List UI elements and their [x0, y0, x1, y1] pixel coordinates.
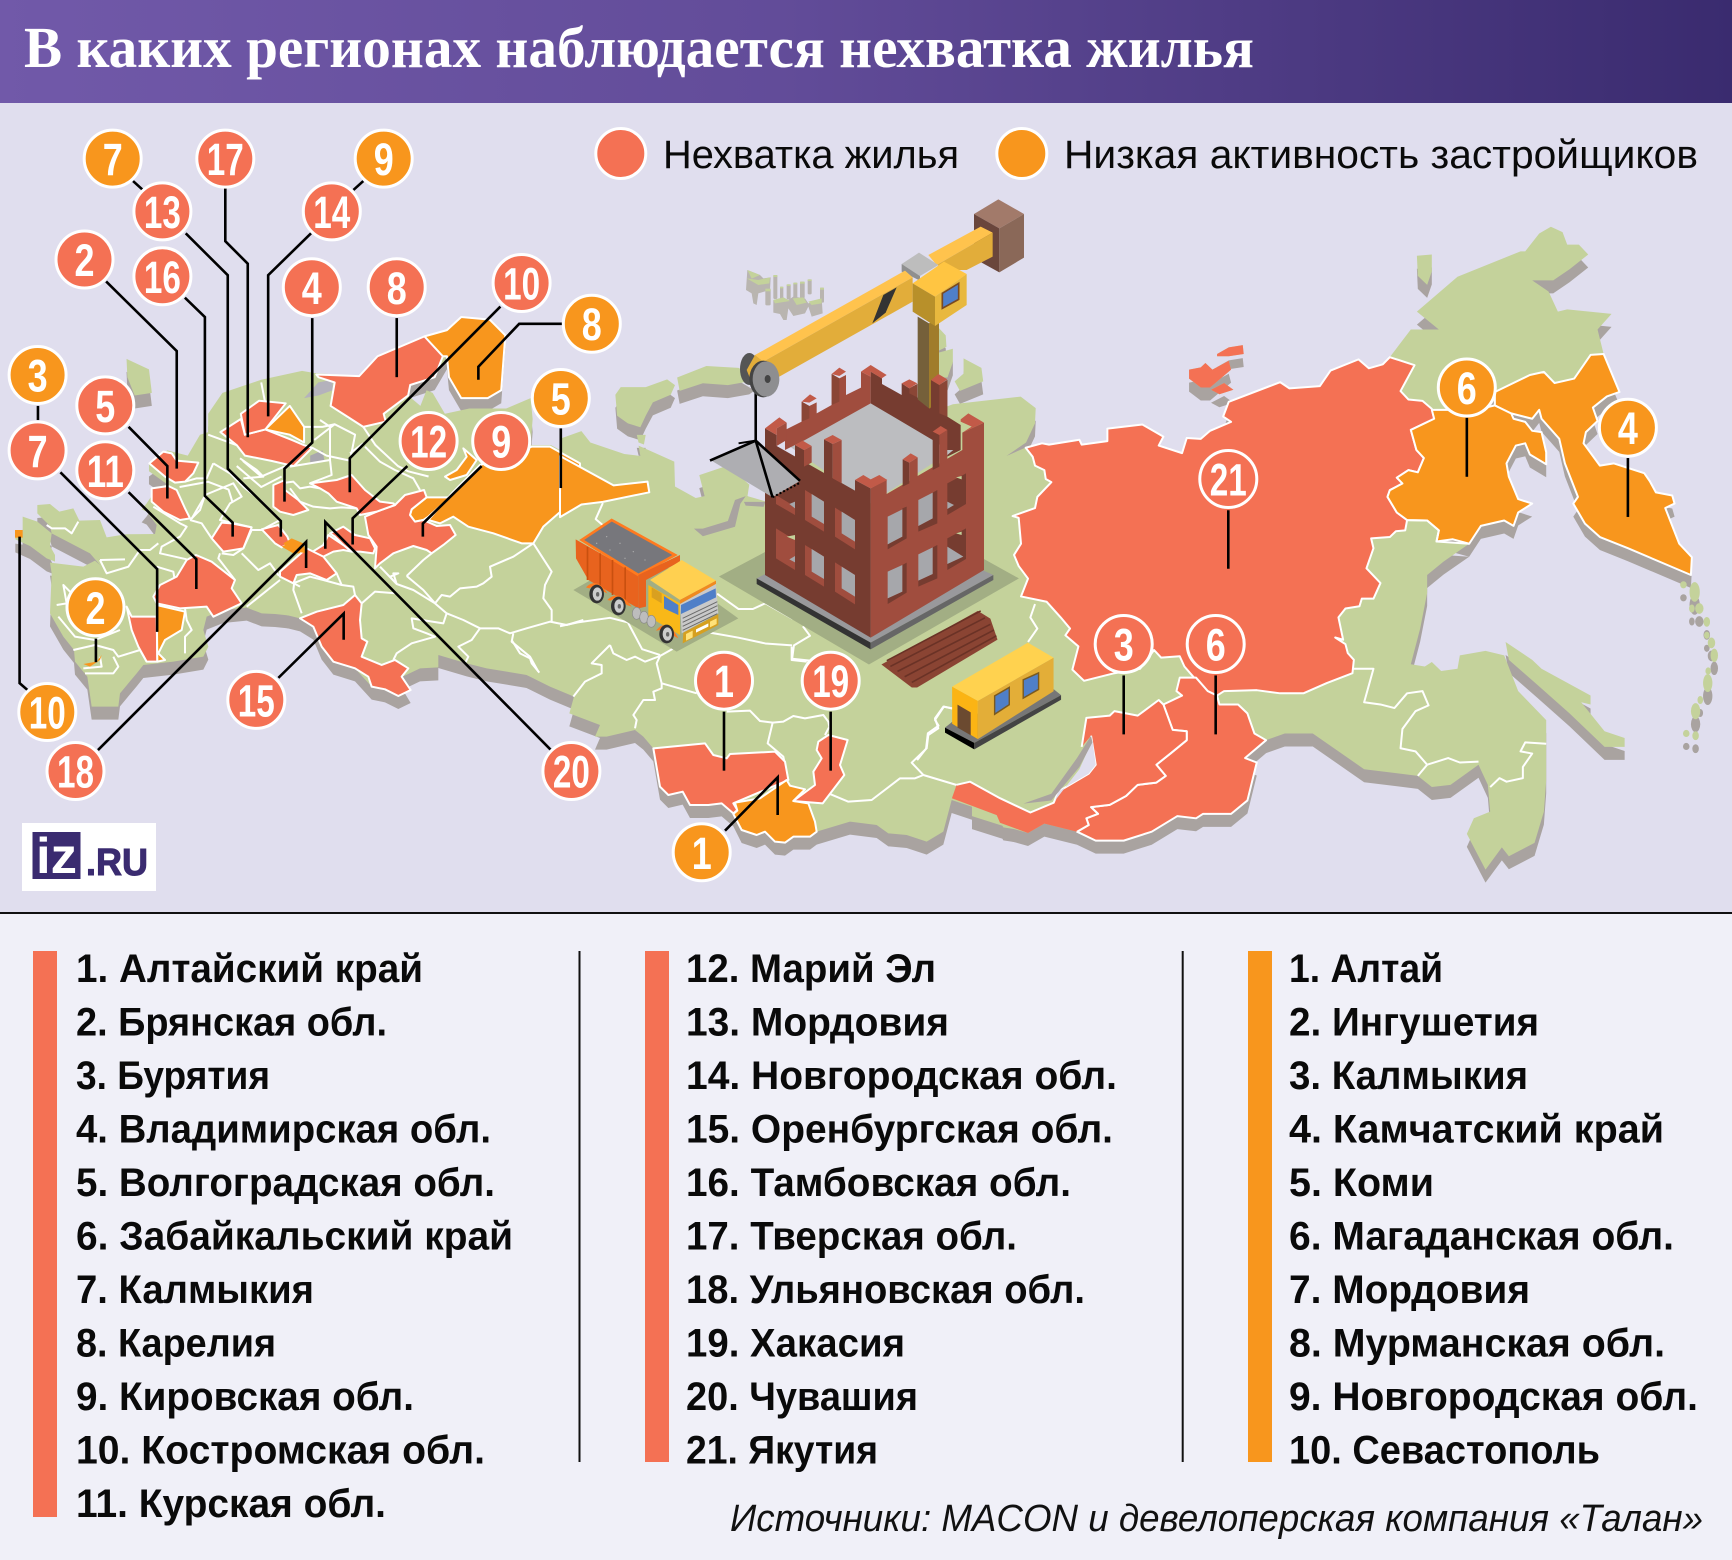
- column 2 color bar: [645, 951, 669, 1462]
- column 3 entries: 1. Алтай: [1289, 947, 1443, 991]
- marker orange 4: 4: [1618, 403, 1638, 454]
- map regions west: [15, 317, 583, 696]
- crane mast: [918, 317, 939, 408]
- legend: [596, 128, 1698, 178]
- marker red 6: 6: [1206, 620, 1226, 670]
- map regions center: [512, 456, 957, 843]
- truck tank: [632, 607, 656, 627]
- column 2 entries: 18. Ульяновская обл.: [686, 1268, 1085, 1312]
- column 2 entries: 21. Якутия: [686, 1428, 878, 1472]
- legend swatch: shortage: [596, 128, 646, 178]
- title: В каких регионах наблюдается нехватка жилья: [24, 15, 1254, 80]
- right wall windows: [888, 473, 966, 604]
- column divider 1: [578, 951, 580, 1462]
- column 1 entries: 11. Курская обл.: [76, 1482, 386, 1526]
- marker red 9: 9: [491, 416, 511, 468]
- marker orange 10: 10: [29, 688, 66, 738]
- crane pulley: [740, 353, 779, 397]
- list column 2: [645, 947, 1117, 1472]
- right front wall: [855, 413, 984, 638]
- divider under map: [0, 912, 1732, 914]
- marker red 3: 3: [1114, 620, 1134, 670]
- marker red 2: 2: [74, 235, 94, 286]
- column 1 entries: 1. Алтайский край: [76, 947, 423, 991]
- marker red 10: 10: [503, 258, 540, 310]
- marker orange 5: [532, 370, 589, 426]
- marker orange 8: [563, 295, 620, 352]
- column 2 entries: 20. Чувашия: [686, 1375, 918, 1419]
- icon: stack of logs: [881, 611, 997, 687]
- truck cab: [648, 560, 718, 643]
- back left wall: [785, 368, 871, 450]
- column 1 entries: 9. Кировская обл.: [76, 1375, 414, 1419]
- legend label: low activity: Низкая активность застройщиков: [1064, 133, 1698, 177]
- hanging platform: [710, 393, 800, 497]
- column 3 entries: 6. Магаданская обл.: [1289, 1214, 1674, 1258]
- back right merlon: [931, 374, 947, 417]
- marker orange 2: 2: [86, 583, 106, 634]
- marker red 15: 15: [238, 676, 275, 726]
- list column 3: [1248, 947, 1698, 1472]
- marker red 1: [696, 652, 752, 709]
- column 3 entries: 2. Ингушетия: [1289, 1000, 1539, 1044]
- marker red 21: 21: [1210, 454, 1247, 506]
- marker orange 2: [67, 579, 124, 636]
- marker red 13: 13: [144, 187, 181, 238]
- column 3 entries: [1289, 947, 1698, 1472]
- map land: [15, 227, 1718, 870]
- list column 1: [33, 947, 513, 1526]
- marker red 14: 14: [313, 187, 350, 238]
- marker red 8: 8: [387, 263, 407, 314]
- foundation slab: [757, 520, 993, 649]
- column 1 entries: [76, 947, 513, 1526]
- column 1 entries: 8. Карелия: [76, 1322, 276, 1366]
- marker red 1: 1: [714, 656, 734, 707]
- column 2 entries: [686, 947, 1117, 1472]
- column 2 entries: 12. Марий Эл: [686, 947, 936, 991]
- crane boom rear: [928, 227, 993, 270]
- legend label: shortage: Нехватка жилья: [663, 133, 959, 177]
- left front wall: [765, 417, 871, 638]
- column 1 color bar: [33, 951, 57, 1517]
- column 3 entries: 4. Камчатский край: [1289, 1108, 1664, 1152]
- icon: dump truck: [573, 520, 738, 652]
- building ground shadow: [719, 496, 1019, 664]
- column 2 entries: 15. Оренбургская обл.: [686, 1108, 1113, 1152]
- column divider 2: [1182, 951, 1184, 1462]
- marker orange 1: 1: [692, 828, 712, 879]
- marker red 5: 5: [95, 381, 115, 432]
- marker red 4: [283, 259, 340, 316]
- legend swatch: low activity: [997, 128, 1047, 178]
- back right wall: [861, 365, 961, 457]
- crane boom front: [747, 271, 913, 387]
- marker red 20: 20: [553, 746, 590, 798]
- marker orange 8: 8: [582, 299, 602, 350]
- island group: Franz Josef Land: [746, 270, 824, 320]
- column 3 entries: 7. Мордовия: [1289, 1268, 1530, 1312]
- marker red 16: 16: [144, 252, 181, 303]
- marker red 6: [1187, 616, 1244, 672]
- crane cab: [913, 262, 967, 326]
- column 1 entries: 5. Волгоградская обл.: [76, 1161, 495, 1205]
- roof slab: [790, 403, 953, 503]
- marker orange 7: [84, 130, 141, 187]
- marker orange 5: 5: [551, 374, 571, 424]
- column 3 color bar: [1248, 951, 1272, 1462]
- marker orange 4: [1599, 399, 1656, 456]
- marker red 7: [9, 422, 66, 479]
- icon: building under construction: [757, 317, 993, 649]
- map extrusion side: [15, 240, 1718, 883]
- column 1 entries: 2. Брянская обл.: [76, 1000, 387, 1044]
- marker red 12: 12: [410, 416, 447, 468]
- column 1 entries: 6. Забайкальский край: [76, 1214, 513, 1258]
- crane counterweight: [974, 199, 1024, 272]
- marker orange 3: 3: [28, 350, 48, 402]
- marker orange 9: [355, 130, 412, 187]
- logo: .RU: [86, 842, 148, 884]
- column 3 entries: 8. Мурманская обл.: [1289, 1322, 1665, 1366]
- marker red 19: 19: [812, 656, 849, 707]
- title banner: [0, 0, 1732, 103]
- leader lines: [20, 181, 1628, 831]
- marker orange 9: 9: [374, 134, 394, 185]
- logo: iz: [36, 828, 77, 884]
- map number markers: [9, 130, 1656, 881]
- map regions east: [952, 345, 1692, 841]
- logo: [22, 823, 156, 891]
- list background: [0, 913, 1732, 1560]
- marker red 4: 4: [302, 263, 322, 314]
- marker red 7: 7: [28, 426, 48, 477]
- marker red 11: 11: [87, 446, 124, 497]
- map background: [0, 0, 1732, 913]
- column 3 entries: 3. Калмыкия: [1289, 1054, 1528, 1098]
- marker orange 6: 6: [1457, 363, 1477, 414]
- column 2 entries: 17. Тверская обл.: [686, 1214, 1017, 1258]
- marker red 2: [56, 231, 113, 288]
- left wall windows: [776, 490, 855, 604]
- column 1 entries: 3. Бурятия: [76, 1054, 270, 1098]
- icon: crane: [740, 199, 1024, 397]
- column 2 entries: 16. Тамбовская обл.: [686, 1161, 1071, 1205]
- marker orange 1: [673, 824, 730, 881]
- truck shadow: [573, 550, 738, 652]
- marker orange 6: [1438, 359, 1495, 416]
- column 2 entries: 14. Новгородская обл.: [686, 1054, 1117, 1098]
- column 3 entries: 10. Севастополь: [1289, 1428, 1600, 1472]
- column 1 entries: 10. Костромская обл.: [76, 1428, 485, 1472]
- truck bed: [576, 520, 680, 608]
- column 3 entries: 9. Новгородская обл.: [1289, 1375, 1698, 1419]
- marker red 18: 18: [57, 746, 94, 798]
- marker red 17: 17: [207, 134, 244, 185]
- marker red 9: [473, 412, 530, 470]
- column 1 entries: 7. Калмыкия: [76, 1268, 314, 1312]
- column 2 entries: 13. Мордовия: [686, 1000, 949, 1044]
- marker red 5: [77, 377, 134, 434]
- marker red 3: [1095, 616, 1152, 672]
- marker orange 7: 7: [103, 134, 123, 185]
- marker orange 3: [9, 346, 66, 404]
- icon: site cabin: [945, 643, 1061, 749]
- marker red 8: [368, 259, 425, 316]
- truck wheels: [586, 583, 678, 643]
- crane trolley: [902, 253, 938, 281]
- column 1 entries: 4. Владимирская обл.: [76, 1108, 491, 1152]
- source note: Источники: MACON и девелоперская компания «Талан»: [730, 1498, 1703, 1540]
- column 3 entries: 5. Коми: [1289, 1161, 1434, 1205]
- column 2 entries: 19. Хакасия: [686, 1322, 905, 1366]
